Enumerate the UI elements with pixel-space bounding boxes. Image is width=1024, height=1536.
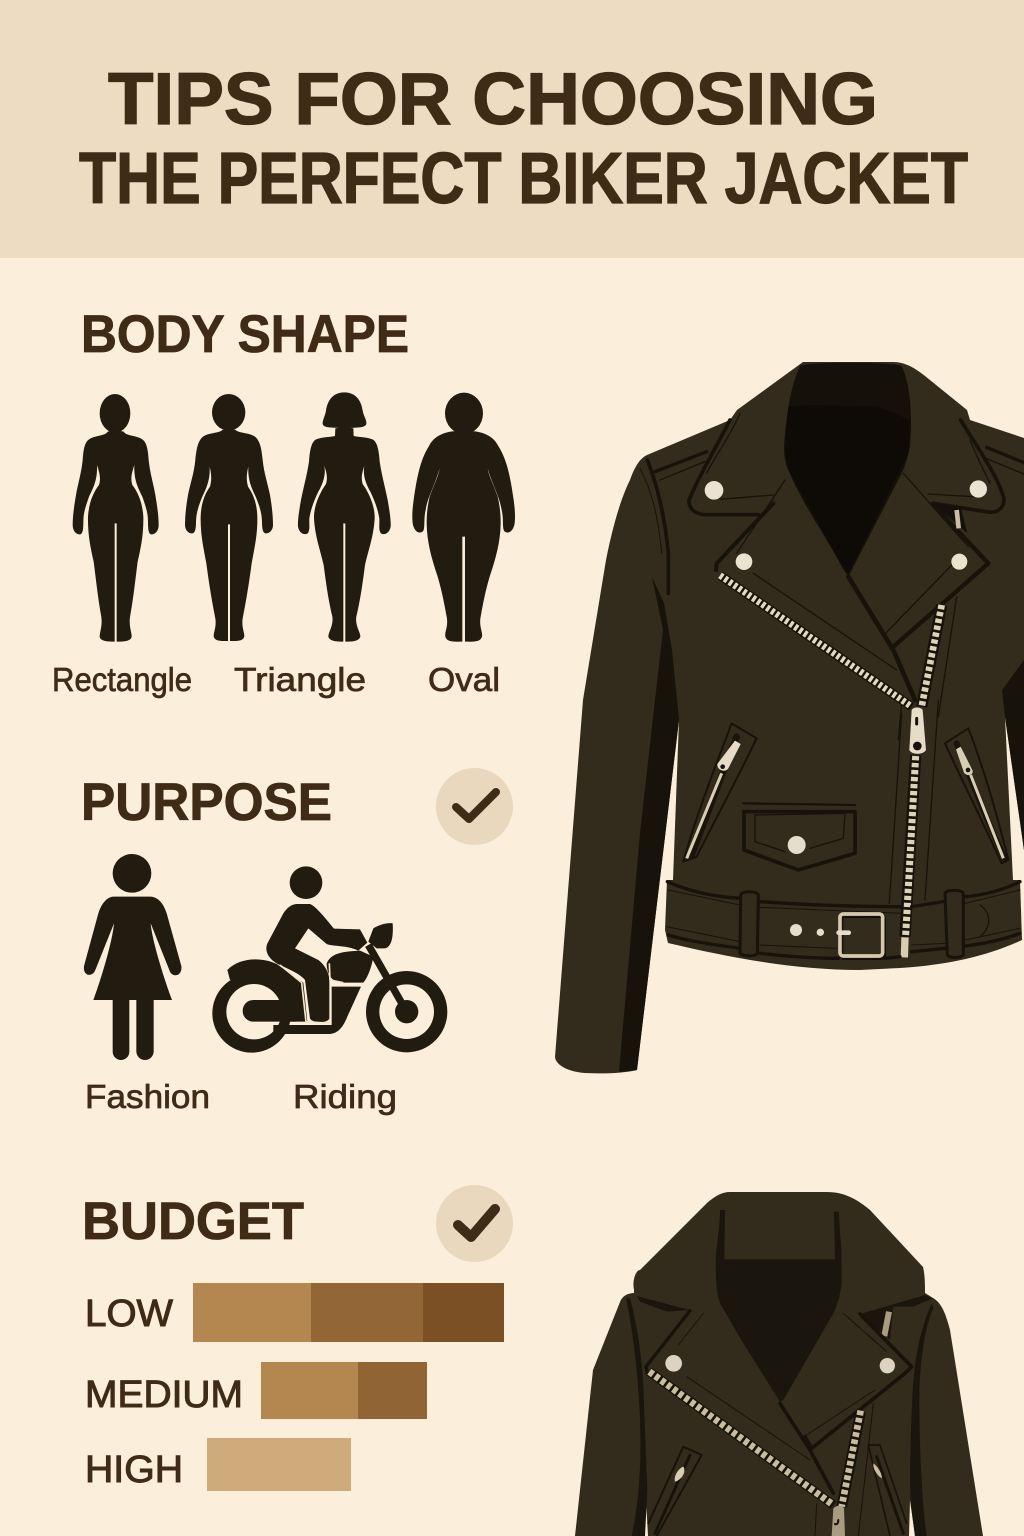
left lapel stitching	[737, 480, 897, 670]
flap pocket snap	[788, 836, 806, 854]
bar: high budget	[207, 1438, 351, 1491]
label: high: HIGH	[85, 1449, 183, 1491]
frame	[273, 987, 361, 1034]
left lapel	[716, 503, 773, 570]
label: riding: Riding	[293, 1078, 397, 1115]
right lapel	[805, 1314, 912, 1448]
left pocket shade	[655, 1455, 690, 1533]
heading: body shape: BODY SHAPE	[81, 305, 409, 364]
left pull hole	[720, 764, 725, 769]
left pocket pull	[717, 741, 741, 771]
rear fender	[227, 959, 307, 1022]
placket lines	[898, 597, 957, 740]
bar: medium budget	[261, 1362, 427, 1419]
lapel rivet left	[665, 1355, 682, 1372]
right pocket shade	[877, 1457, 903, 1533]
title	[79, 59, 968, 219]
panel: purpose icons	[84, 854, 447, 1060]
vertical zipper tape	[842, 1412, 861, 1507]
jacket silhouette	[575, 1192, 983, 1536]
center closure	[848, 577, 915, 700]
zipper end	[893, 937, 916, 957]
left sleeve shadow	[619, 577, 679, 1072]
neck opening	[716, 1259, 842, 1402]
placket lines lower	[889, 700, 938, 903]
right sleeve shadow	[1002, 660, 1024, 850]
jacket silhouette	[555, 362, 1024, 1073]
flap pocket outline	[744, 812, 855, 870]
sleeve seam stitching	[640, 468, 662, 553]
rider body	[266, 904, 367, 1022]
zipper slider	[909, 707, 926, 754]
vertical zipper teeth upper	[922, 605, 942, 707]
shoulder strap left	[655, 452, 707, 472]
shoulder strap right	[987, 447, 1024, 463]
collar rivets	[705, 480, 987, 570]
right pocket shade	[957, 743, 1005, 859]
slider slot	[912, 718, 921, 724]
diagonal zipper teeth	[720, 575, 912, 707]
headlight	[368, 923, 393, 948]
left collar shadow	[637, 1296, 690, 1312]
upper jacket details	[640, 363, 1024, 740]
left pocket zip	[687, 773, 722, 858]
label: low: LOW	[85, 1293, 173, 1335]
right collar	[933, 420, 1004, 512]
slider slot	[835, 1520, 838, 1524]
vertical zipper tape upper	[922, 605, 942, 707]
shoulder strap left stitching	[660, 462, 705, 480]
left pocket outline	[648, 1447, 702, 1536]
icon: purpose check badge	[436, 768, 513, 845]
right sleeve shadow	[910, 1303, 933, 1536]
label: oval: Oval	[428, 661, 500, 698]
illustration: second biker jacket	[575, 1192, 983, 1536]
diagonal zipper teeth	[649, 1372, 833, 1505]
figure: triangle	[185, 394, 273, 641]
flap pocket top line	[743, 803, 855, 805]
left sleeve shadow	[626, 1298, 647, 1536]
figure: hourglass with bob hair	[298, 392, 391, 642]
icon: motorcycle rider	[212, 866, 447, 1053]
left collar	[689, 420, 758, 515]
figure: oval	[412, 393, 515, 642]
rear wheel	[212, 974, 291, 1053]
right pocket zip	[971, 775, 1003, 858]
placket lines	[815, 1403, 873, 1536]
tank	[327, 951, 373, 983]
bar: low budget	[193, 1283, 504, 1342]
panel: body shape figures	[73, 392, 515, 642]
neck opening	[784, 363, 911, 577]
left lapel stitching	[678, 1313, 810, 1460]
belt loop left	[740, 892, 758, 956]
vertical zipper tape lower	[905, 755, 916, 937]
right collar shadow	[860, 1295, 933, 1340]
belt lines heavy	[667, 882, 1020, 907]
right pocket outline	[868, 1445, 907, 1536]
belt rivet large	[790, 924, 802, 936]
right lapel stitching	[807, 1313, 887, 1435]
belt lines bottom	[668, 933, 1020, 958]
right pocket pull	[956, 747, 973, 775]
jacket details	[626, 1210, 933, 1536]
sleeve seam	[647, 460, 668, 593]
diagonal zipper tape	[649, 1372, 833, 1505]
label: triangle: Triangle	[234, 661, 366, 698]
neck inner shade	[785, 405, 910, 573]
collar gap	[933, 503, 967, 533]
title: TIPS FOR CHOOSING	[108, 59, 878, 140]
belt rivet small	[817, 929, 824, 936]
center closure	[780, 1403, 833, 1493]
zipper stub	[884, 1312, 889, 1336]
left pocket outline	[683, 723, 757, 862]
header band	[0, 0, 1024, 258]
lapel rivet right	[880, 1358, 895, 1373]
left collar stitching	[707, 413, 773, 499]
figure: rectangle	[73, 394, 159, 642]
slider hole	[913, 742, 922, 750]
buckle prong	[839, 926, 849, 940]
zipper slider	[832, 1506, 845, 1536]
page background	[0, 0, 1024, 258]
label: medium: MEDIUM	[85, 1374, 243, 1416]
diagonal zipper tape	[720, 575, 912, 707]
label: rectangle: Rectangle	[52, 661, 192, 698]
left pocket pull	[675, 1467, 684, 1482]
right pocket pull	[873, 1463, 882, 1478]
illustration: main biker jacket	[555, 362, 1024, 1073]
front wheel	[366, 971, 447, 1052]
right pocket outline	[945, 728, 1008, 863]
vertical zipper teeth	[842, 1411, 861, 1507]
rider outline gap	[280, 963, 343, 1023]
left pocket shade	[692, 737, 737, 855]
belt buckle shadow	[841, 916, 884, 958]
heading: purpose: PURPOSE	[81, 773, 332, 832]
belt stitching bottom	[667, 927, 1020, 948]
belt buckle	[840, 914, 883, 956]
zipper stub	[957, 510, 959, 528]
collar back inner	[716, 1210, 842, 1259]
flap pocket stitching	[755, 813, 845, 852]
icon: fashion woman	[84, 854, 181, 1060]
icon: budget check badge	[436, 1185, 513, 1262]
heading: budget: BUDGET	[82, 1192, 304, 1251]
label: fashion: Fashion	[85, 1078, 210, 1115]
belt tail	[980, 905, 989, 937]
right collar stitching	[928, 440, 990, 497]
slider shadow	[835, 1507, 843, 1536]
fork	[368, 945, 407, 1012]
left lapel	[646, 1311, 690, 1373]
belt stitching top	[668, 890, 1020, 913]
shoulder strap right stitching	[983, 457, 1024, 474]
right lapel stitching	[885, 473, 968, 634]
lower jacket details	[667, 700, 1020, 958]
right pull hole	[966, 768, 970, 772]
vertical zipper teeth lower	[906, 756, 916, 935]
belt loop right	[945, 890, 963, 957]
right lapel	[893, 504, 988, 647]
